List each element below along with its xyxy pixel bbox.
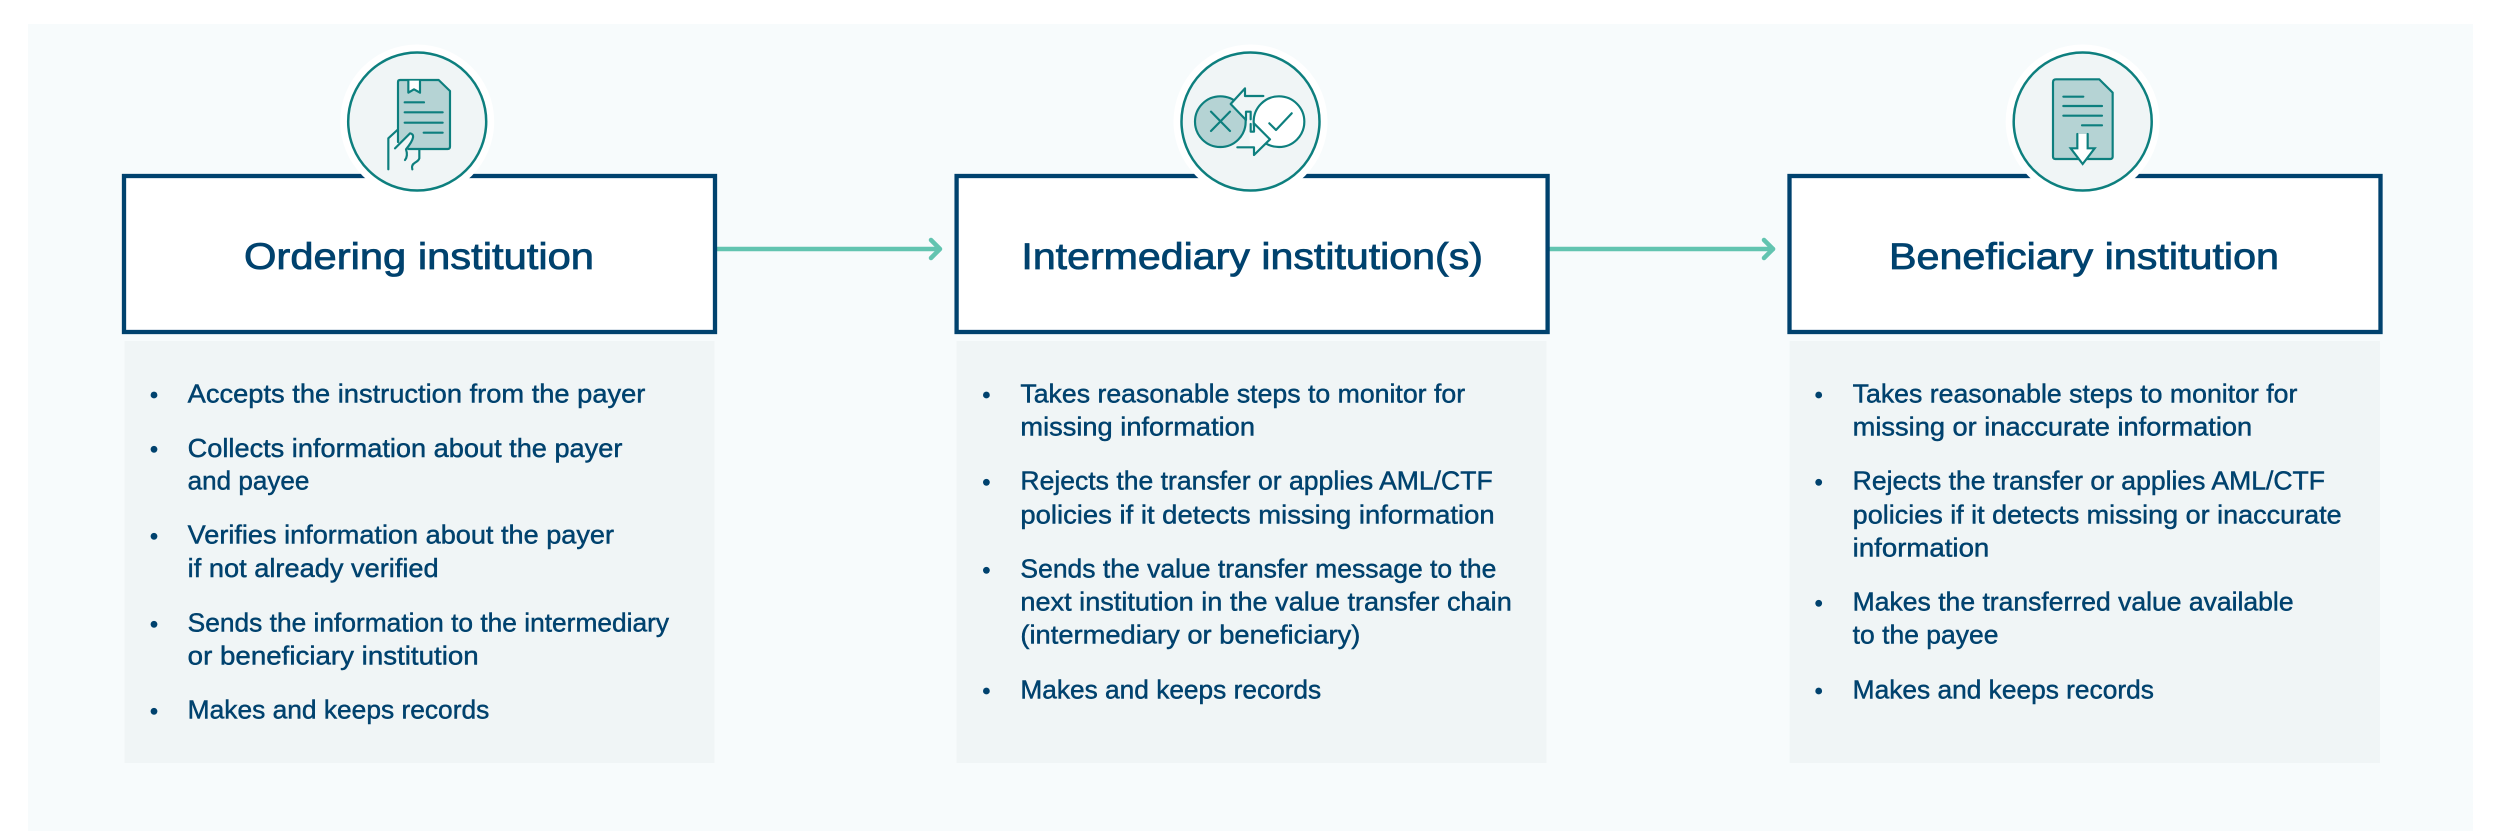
bullet 2: information [1853, 535, 1989, 563]
bullet 1 [1815, 381, 2298, 442]
bullet 3: to the payee [1853, 622, 1998, 650]
bullet 2: Rejects the transfer or applies AML/CTF [1853, 468, 2325, 496]
bullet 1 [983, 381, 1466, 442]
panel: ordering institution [124, 44, 715, 763]
heading box [124, 176, 715, 332]
heading box [1790, 176, 2380, 332]
bullet 2: policies if it detects missing or inaccurate [1853, 501, 2342, 529]
bullet list [983, 381, 1512, 704]
bullet 4: Sends the information to the intermediary [188, 610, 669, 638]
bullet 2 [1815, 468, 2342, 563]
heading box [957, 176, 1548, 332]
bullet 3: (intermediary or beneficiary) [1020, 622, 1360, 650]
bullet 4 [151, 610, 669, 671]
bullet 2 [151, 435, 623, 496]
bullet 2: Rejects the transfer or applies AML/CTF [1020, 468, 1493, 496]
bullet 4: or beneficiary institution [188, 643, 479, 671]
icon: cross and check exchange [1174, 44, 1328, 198]
bullet 1: Takes reasonable steps to monitor for [1020, 381, 1466, 409]
bullet 2 [983, 468, 1495, 529]
bullet 3: if not already verified [188, 555, 439, 583]
bullet 3 [151, 522, 614, 583]
bullet 3: Verifies information about the payer [188, 522, 614, 550]
bullet 3: Sends the value transfer message to the [1020, 556, 1496, 584]
bullet 1: missing information [1020, 414, 1255, 442]
responsibilities background [1790, 341, 2380, 763]
bullet 3: next institution in the value transfer chain [1020, 589, 1512, 617]
bullet 1: Takes reasonable steps to monitor for [1853, 381, 2298, 409]
bullet 1: Accepts the instruction from the payer [188, 381, 646, 409]
arrow: ordering to intermediary [717, 240, 940, 258]
bullet 2: and payee [188, 468, 309, 496]
arrow: intermediary to beneficiary [1550, 240, 1773, 258]
bullet 4: Makes and keeps records [1020, 676, 1321, 704]
heading: Ordering institution [244, 236, 594, 277]
panel: beneficiary institution [1790, 44, 2380, 763]
responsibilities background [124, 341, 714, 763]
responsibilities background [956, 341, 1546, 763]
icon: hand holding document [340, 44, 494, 198]
bullet 2: Collects information about the payer [188, 435, 623, 463]
bullet 4: Makes and keeps records [1853, 676, 2154, 704]
bullet 1: missing or inaccurate information [1853, 414, 2252, 442]
bullet 2: policies if it detects missing information [1020, 501, 1495, 529]
bullet 3 [1815, 589, 2294, 650]
bullet 3 [983, 556, 1512, 650]
heading: Beneficiary institution [1889, 236, 2279, 277]
panel: intermediary institutions [956, 44, 1548, 763]
bullet list [1815, 381, 2342, 704]
icon: document with download arrow [2006, 44, 2160, 198]
bullet 5: Makes and keeps records [188, 696, 489, 724]
heading: Intermediary institution(s) [1021, 236, 1483, 277]
bullet 3: Makes the transferred value available [1853, 589, 2294, 617]
bullet list [151, 381, 669, 724]
